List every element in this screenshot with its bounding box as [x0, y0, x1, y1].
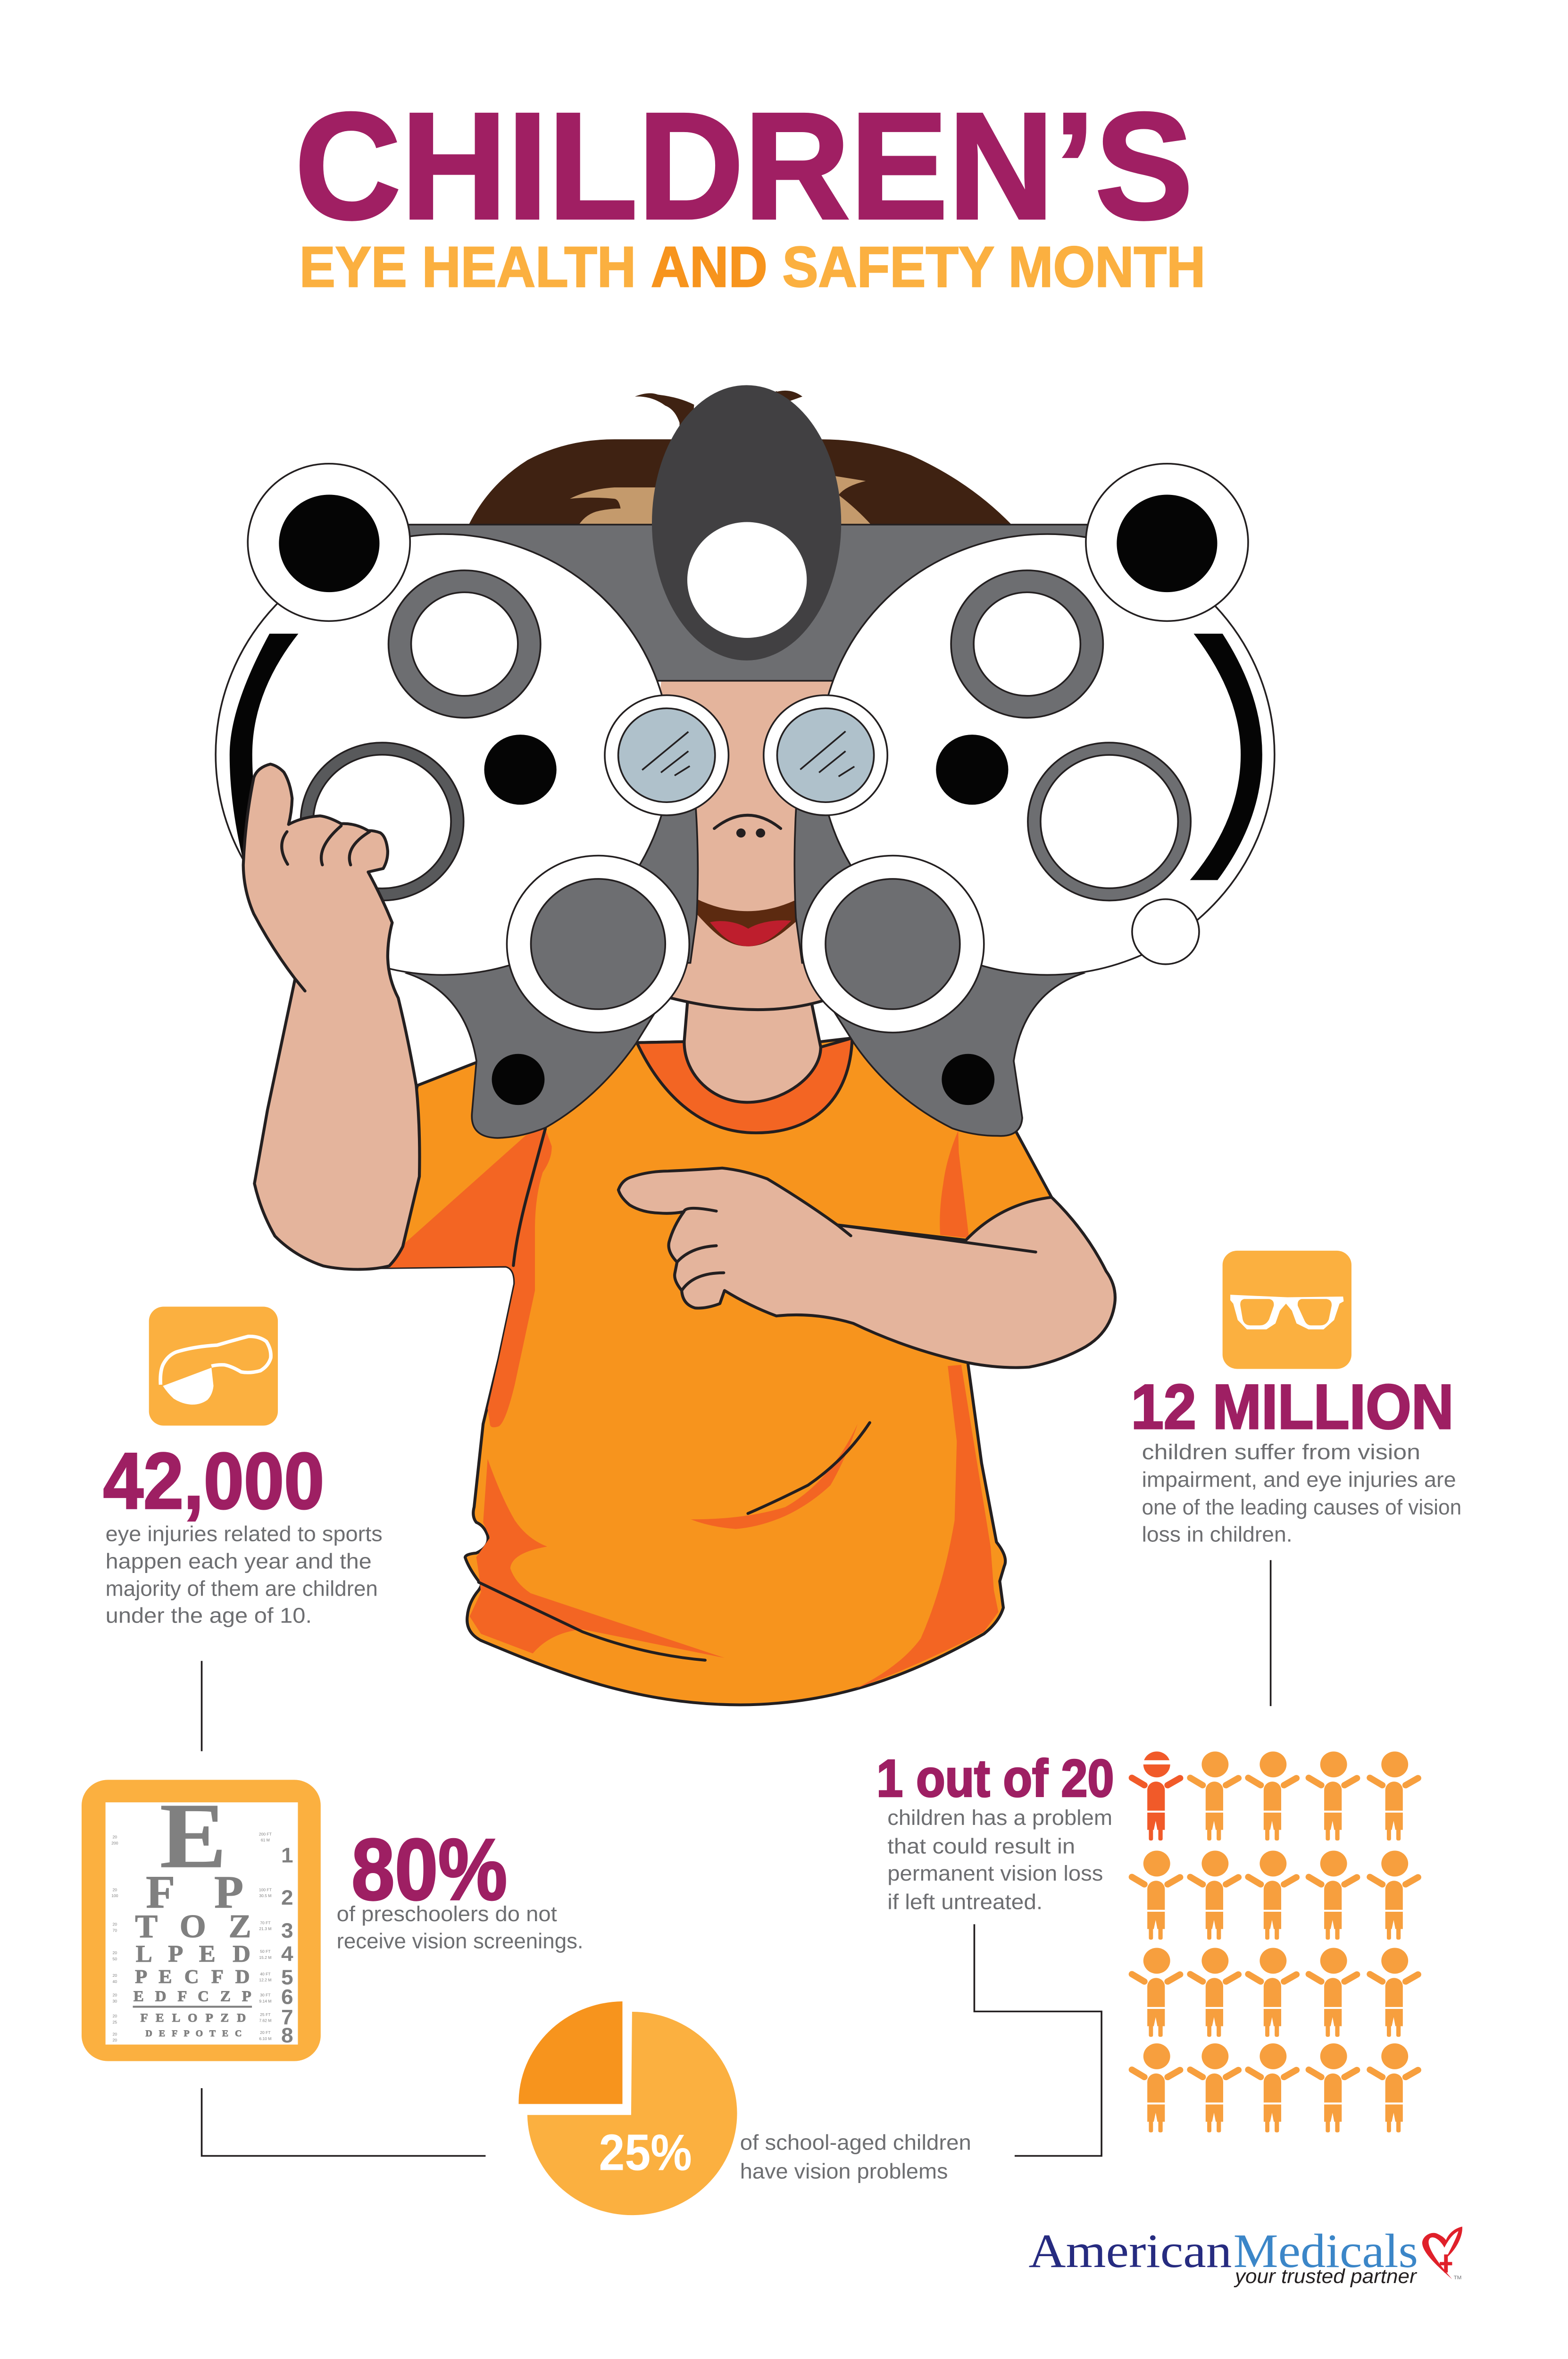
chart small labels: 200 FT [259, 1832, 272, 1836]
chart letters: D E F P O T E C [145, 2029, 242, 2039]
stat text: under the age of 10. [106, 1603, 312, 1627]
chart small labels: 30.5 M [259, 1893, 271, 1898]
pointing hand creases [677, 1208, 1036, 1290]
shirt [380, 1038, 1051, 1705]
chart line numbers: 5 [281, 1966, 293, 1989]
chart small labels: 20 [113, 2032, 117, 2036]
pie label: 25% [599, 2124, 692, 2181]
panel: 12 million [1131, 1251, 1461, 1546]
connector lines [202, 1560, 1271, 2156]
chart small labels [111, 1832, 272, 2042]
chart small labels: 20 [113, 1973, 117, 1978]
stat text: if left untreated. [887, 1890, 1043, 1914]
subtitle: EYE HEALTH AND SAFETY MONTH [300, 235, 1205, 299]
stat text: happen each year and the [106, 1549, 372, 1573]
stat text [337, 1902, 584, 1953]
black arc left [230, 634, 298, 880]
left optical disc [216, 534, 670, 975]
right bracket [822, 948, 1083, 1136]
stat text: of school-aged children [740, 2130, 971, 2155]
chart small labels: 40 [113, 1979, 117, 1984]
chart small labels: 21.3 M [259, 1926, 271, 1931]
black arc right [1190, 634, 1262, 880]
lower phoropter brackets [407, 948, 1083, 1138]
eye lens right [764, 695, 887, 815]
chart letters: F E L O P Z D [141, 2011, 246, 2024]
chart small labels: 50 FT [260, 1949, 271, 1954]
chart small labels: 30 FT [260, 1993, 271, 1997]
bracket dots [492, 1054, 544, 1105]
chart letters: F P [146, 1866, 243, 1918]
chart small labels: 30 [113, 1999, 117, 2003]
title: CHILDREN’S [295, 82, 1193, 251]
stat text: eye injuries related to sports [106, 1522, 383, 1546]
icon: glasses [1223, 1251, 1351, 1369]
chart small labels: 50 [113, 1957, 117, 1961]
chart small labels: 20 [113, 1950, 117, 1955]
chart small labels: 20 [113, 1887, 117, 1892]
ring lower left [300, 743, 464, 901]
chart line numbers: 2 [281, 1886, 293, 1909]
chart line numbers: 4 [281, 1942, 293, 1966]
chart line numbers: 7 [281, 2005, 293, 2029]
chart letters: P E C F D [135, 1966, 250, 1988]
stat heading: 42,000 [103, 1437, 324, 1525]
chart line numbers: 8 [281, 2023, 293, 2047]
stat text: one of the leading causes of vision [1142, 1495, 1461, 1519]
stat text [887, 1806, 1112, 1914]
chart small labels: 12.2 M [259, 1978, 271, 1983]
small circle top left [248, 464, 410, 621]
left arm with raised finger [243, 764, 419, 1269]
chart small labels: 100 FT [259, 1887, 272, 1892]
chart small labels: 20 FT [260, 2030, 271, 2035]
phoropter top bar [405, 525, 1088, 681]
panel: eye chart [82, 1780, 321, 2061]
illustration: child at phoropter [216, 385, 1275, 1705]
stat text: receive vision screenings. [337, 1929, 584, 1953]
chart letters: L P E D [136, 1941, 250, 1967]
stat text: permanent vision loss [887, 1861, 1103, 1885]
chart small labels: 40 FT [260, 1972, 271, 1976]
stat text: have vision problems [740, 2159, 948, 2183]
stat heading: 12 MILLION [1131, 1372, 1454, 1442]
stat text: of preschoolers do not [337, 1902, 557, 1926]
icon: eye patch [149, 1306, 278, 1426]
stat heading: 1 out of 20 [876, 1749, 1114, 1808]
bottom lens right [801, 855, 984, 1032]
chart small labels: 9.14 M [259, 1999, 271, 2003]
chart line numbers: 6 [281, 1985, 293, 2008]
hair [469, 391, 1011, 525]
chart letters: E D F C Z P [133, 1988, 251, 2005]
panel: 42,000 [103, 1306, 383, 1627]
chart small labels: 100 [111, 1893, 118, 1898]
collar and neck [637, 993, 852, 1133]
panel: 1 out of 20 [876, 1749, 1418, 2133]
chart small labels: 7.62 M [259, 2018, 271, 2023]
ring top left [389, 570, 541, 718]
left bracket [407, 948, 667, 1138]
chart line numbers [281, 1843, 293, 2047]
bottom lens left [507, 855, 689, 1032]
chart letters: E [160, 1784, 226, 1888]
black dot left [484, 735, 557, 805]
panel: 80 percent [337, 1821, 584, 1953]
logo: American Medicals [1029, 2225, 1462, 2288]
knob [1132, 899, 1199, 964]
chart small labels: 70 FT [260, 1921, 271, 1925]
face [639, 677, 856, 1010]
logo: American Medicals: American [1029, 2225, 1232, 2277]
chart small labels: 25 FT [260, 2012, 271, 2017]
stat text [106, 1522, 383, 1627]
forehead oval [652, 385, 841, 661]
stat text: children has a problem [887, 1806, 1112, 1830]
chart small labels: 200 [111, 1841, 118, 1845]
nose strips [613, 797, 876, 963]
chart small labels: 20 [113, 2014, 117, 2018]
black dot right [936, 735, 1008, 805]
chart line numbers: 1 [281, 1843, 293, 1867]
raised hand creases [282, 826, 370, 991]
nose [714, 815, 781, 837]
shirt shading [388, 1129, 998, 1689]
stat text: children suffer from vision [1142, 1440, 1420, 1464]
chart small labels: 20 [113, 1835, 117, 1840]
ring top right [951, 570, 1103, 718]
logo: American Medicals: your trusted partner [1234, 2265, 1418, 2288]
stat text: loss in children. [1142, 1522, 1293, 1546]
stat text: majority of them are children [106, 1576, 378, 1600]
pie chart [518, 2001, 737, 2215]
shirt creases [479, 1129, 870, 1660]
icon: heart with cross: TM [1454, 2275, 1461, 2281]
mouth [692, 897, 802, 946]
chin line [671, 998, 824, 1010]
chart small labels: 20 [113, 2038, 117, 2042]
chart small labels: 20 [113, 1922, 117, 1927]
stat text: impairment, and eye injuries are [1142, 1467, 1456, 1491]
icon: heart with cross [1422, 2226, 1462, 2281]
logo: American Medicals: Medicals [1234, 2225, 1418, 2277]
stat text: that could result in [887, 1834, 1075, 1858]
chart small labels: 15.2 M [259, 1955, 271, 1960]
panel: 25 percent pie [518, 2001, 971, 2215]
stat text [1142, 1440, 1461, 1546]
small circle top right [1086, 464, 1248, 621]
ring lower right [1028, 743, 1191, 901]
eye lens left [605, 695, 728, 815]
chart small labels: 20 [113, 1993, 117, 1997]
chart letters [133, 1784, 252, 2039]
stat text [740, 2130, 971, 2183]
right optical disc [820, 534, 1275, 975]
chart small labels: 25 [113, 2020, 117, 2024]
chart letters: T O Z [135, 1908, 251, 1945]
chart small labels: 6.10 M [259, 2036, 271, 2041]
chart small labels: 61 M [261, 1838, 270, 1842]
stat heading: 80% [351, 1821, 507, 1918]
right arm pointing [618, 1168, 1115, 1368]
chart line numbers: 3 [281, 1919, 293, 1942]
chart small labels: 70 [113, 1928, 117, 1932]
pictogram: 20 children [1132, 1751, 1418, 2133]
